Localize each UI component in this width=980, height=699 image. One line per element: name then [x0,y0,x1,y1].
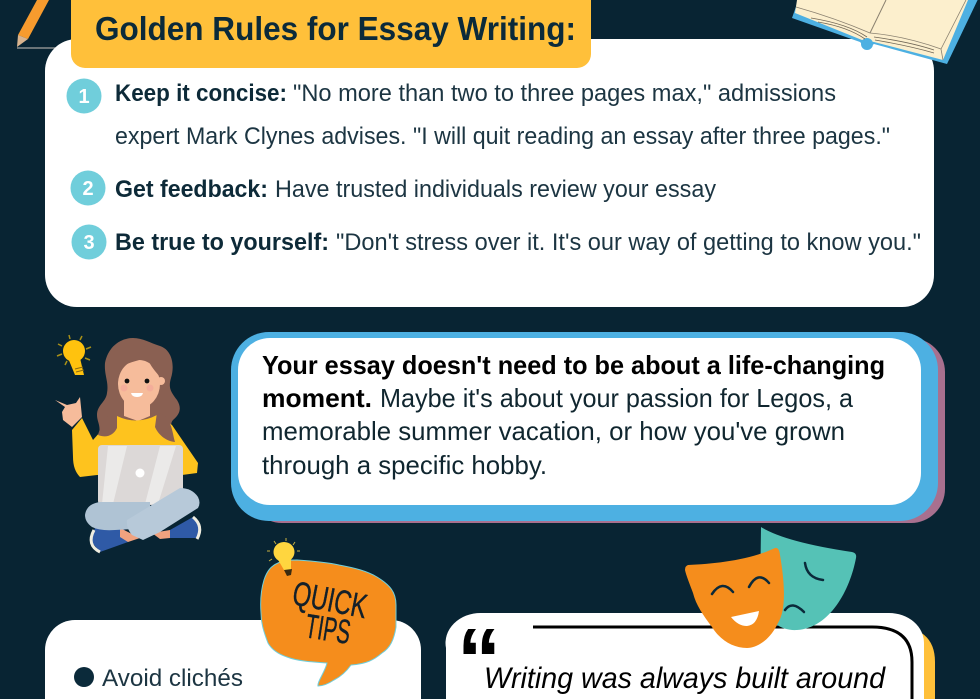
icon: theatre masks [685,527,856,648]
hair strands over shoulders [98,412,175,442]
panel: essay callout: Your essay doesn't need to be about a life-changing [262,350,885,380]
icon: open book [792,0,980,64]
hair [97,338,180,442]
rule 1: "No more than two to three pages max," admissions [293,80,836,107]
callout: quick tips speech bubble: QUICK [289,575,371,626]
panel: quick tips [45,620,421,699]
rule 2 [70,170,716,206]
ankles [120,528,170,542]
panel: essay callout: Maybe it's about your passion for Legos, a [380,383,854,413]
rule 1: expert Mark Clynes advises. "I will quit reading an essay after three pages." [115,123,890,150]
panel: quick tips: Avoid clichés [102,665,243,692]
panel: essay callout: memorable summer vacation, or how you've grown [262,416,845,446]
callout: quick tips speech bubble: TIPS [303,607,353,652]
panel: essay callout: through a specific hobby. [262,450,547,480]
heading: golden rules banner: Golden Rules for Essay Writing: [95,10,576,47]
rule 1: 1 [78,86,90,108]
hand [55,397,82,427]
shoes [90,525,128,552]
rule 1 [66,78,890,150]
callout: quick tips speech bubble [261,560,396,686]
illustration: student with laptop [55,338,200,552]
panel: quote card: Writing was always built around [484,662,886,695]
icon: light bulb on bubble [267,538,300,576]
rule 3 [72,224,921,260]
rule 2: Have trusted individuals review your essay [275,176,716,203]
rule 3: Be true to yourself: [115,229,329,256]
face [118,360,160,408]
rule 2: 2 [82,178,94,200]
heading: golden rules banner [71,0,591,68]
rule 2: Get feedback: [115,176,268,203]
sweater and arms [72,415,198,477]
panel: essay callout: moment. [262,383,372,413]
laptop [98,445,183,505]
neck [124,398,150,421]
rule 3: 3 [83,232,95,254]
panel: essay callout [231,332,945,523]
rule 3: "Don't stress over it. It's our way of getting to know you." [336,229,921,256]
panel: golden rules [45,39,934,307]
panel: quote card [446,610,935,699]
legs [85,502,150,530]
rule 1: Keep it concise: [115,80,287,107]
icon: light bulb near student [57,335,91,375]
icon: pencil [17,0,56,48]
